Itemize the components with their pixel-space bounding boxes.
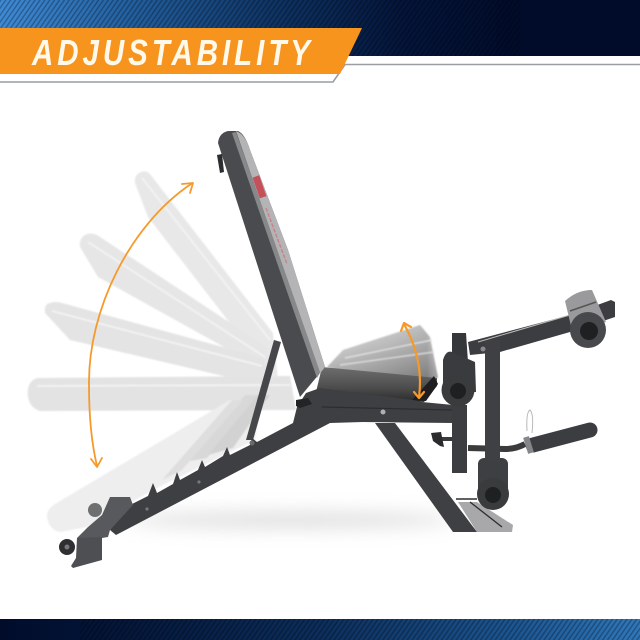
upper foam roller <box>565 290 606 348</box>
orange arrow: seat range <box>401 323 424 398</box>
white header underlay with grey rule <box>0 56 640 82</box>
ghost seat positions <box>327 325 438 392</box>
top header band <box>0 0 640 56</box>
leg developer lower arm weight sleeve <box>526 410 590 453</box>
orange arrow: backrest range <box>89 183 193 467</box>
ghost motion backrests <box>28 171 296 532</box>
orange title banner <box>0 28 362 74</box>
leg developer pivot bar with knob <box>431 432 525 449</box>
leg developer arm <box>468 300 615 462</box>
main bench frame rail <box>110 388 453 535</box>
leg developer front post <box>452 333 468 473</box>
seat pad <box>316 367 438 402</box>
title: ADJUSTABILITY <box>31 32 313 73</box>
lower foam roller <box>477 440 509 510</box>
main backrest pad <box>217 131 325 397</box>
middle foam roller <box>442 352 476 406</box>
backrest support strut <box>246 340 281 440</box>
hinge bracket <box>296 398 312 408</box>
front foot and wheel <box>59 497 133 568</box>
floor shadow <box>125 512 455 528</box>
rear leg and foot plate <box>375 423 513 532</box>
bottom footer band <box>0 619 640 640</box>
red logo marks <box>253 175 287 264</box>
